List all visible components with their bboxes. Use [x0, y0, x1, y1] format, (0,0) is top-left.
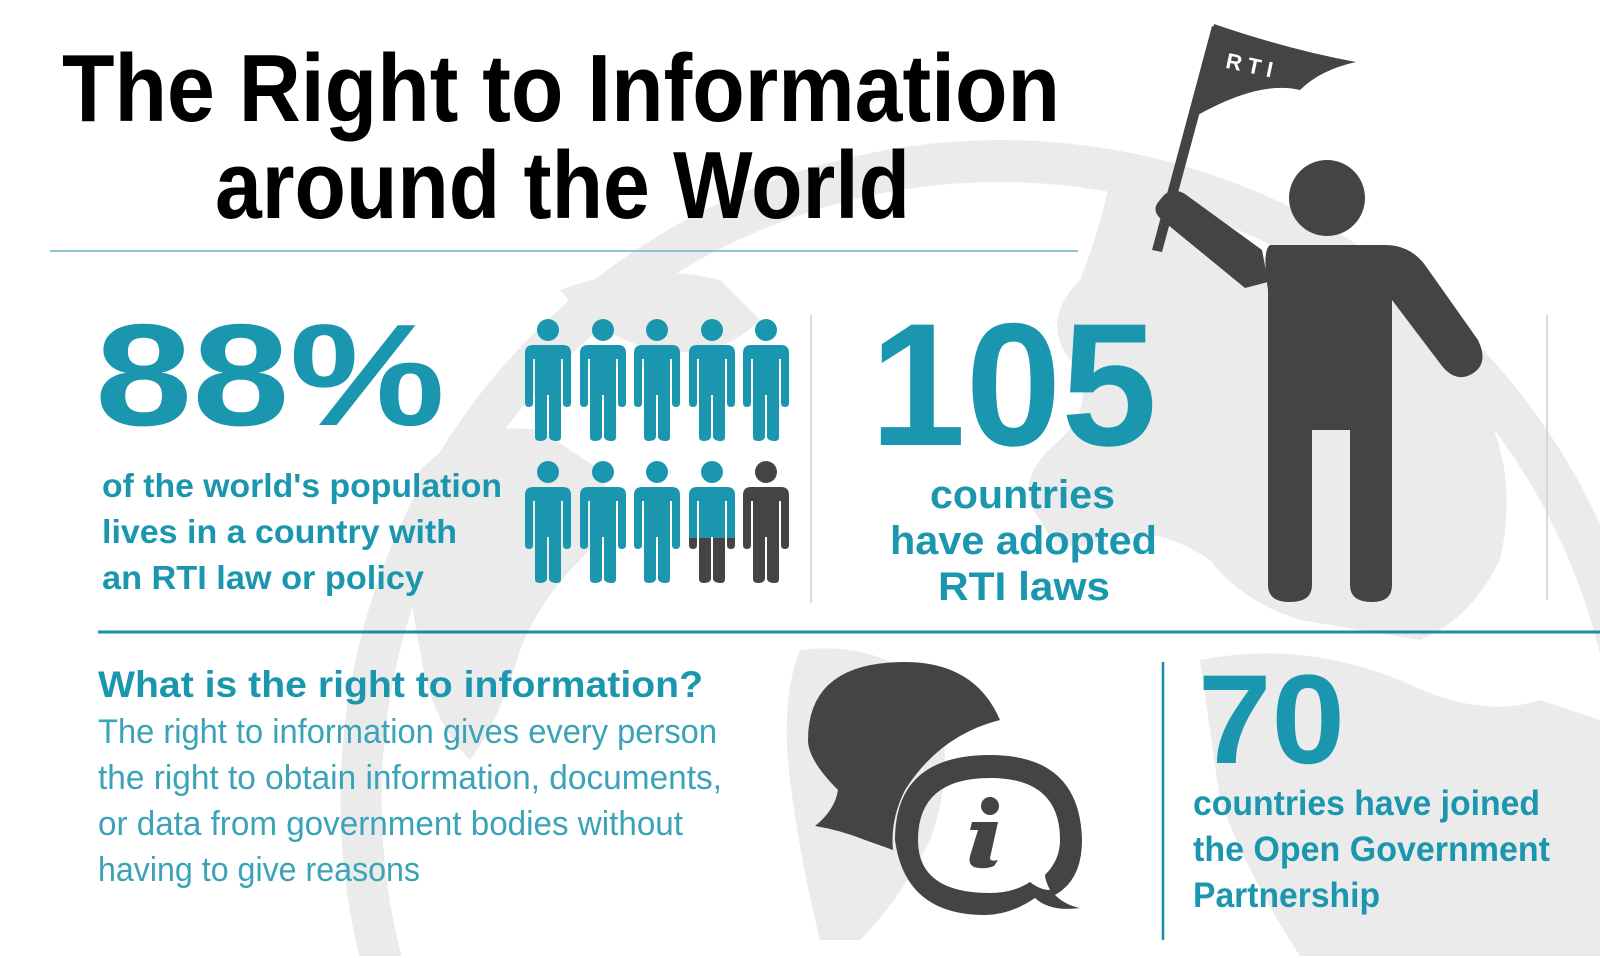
stat: 88%: [95, 294, 502, 596]
stat: 70: 70: [1198, 648, 1345, 790]
icon: speech bubbles with info: [808, 662, 1082, 915]
text block: what is RTI: What is the right to information?: [98, 664, 703, 705]
stat: 88%: 88%: [95, 294, 445, 456]
stat: 105: have adopted: [890, 519, 1157, 563]
text block: what is RTI: or data from government bodies without: [98, 805, 684, 843]
background globe: [341, 140, 1600, 958]
stat: 70: [1193, 648, 1550, 915]
title: around the World: [215, 132, 910, 239]
text block: what is RTI: having to give reasons: [98, 851, 420, 889]
people icons: [525, 319, 789, 583]
icon: person with RTI flag: RTI: [1224, 48, 1281, 84]
stat: 105: [870, 288, 1157, 609]
stat: 70: the Open Government: [1193, 830, 1550, 869]
stat: 105: 105: [870, 288, 1157, 483]
stat: 88%: an RTI law or policy: [102, 559, 425, 596]
stat: 105: RTI laws: [938, 565, 1110, 609]
stat: 105: countries: [930, 473, 1115, 517]
text block: what is RTI: The right to information gives every person: [98, 713, 717, 751]
text block: what is RTI: the right to obtain information, documents,: [98, 759, 722, 797]
stat: 70: Partnership: [1193, 876, 1380, 915]
title: The Right to Information: [62, 35, 1060, 142]
stat: 70: countries have joined: [1193, 784, 1540, 823]
text block: what is RTI: [98, 664, 722, 889]
stat: 88%: lives in a country with: [102, 513, 457, 550]
title: [62, 35, 1060, 239]
stat: 88%: of the world's population: [102, 467, 502, 504]
icon: person with RTI flag: [1152, 24, 1482, 602]
